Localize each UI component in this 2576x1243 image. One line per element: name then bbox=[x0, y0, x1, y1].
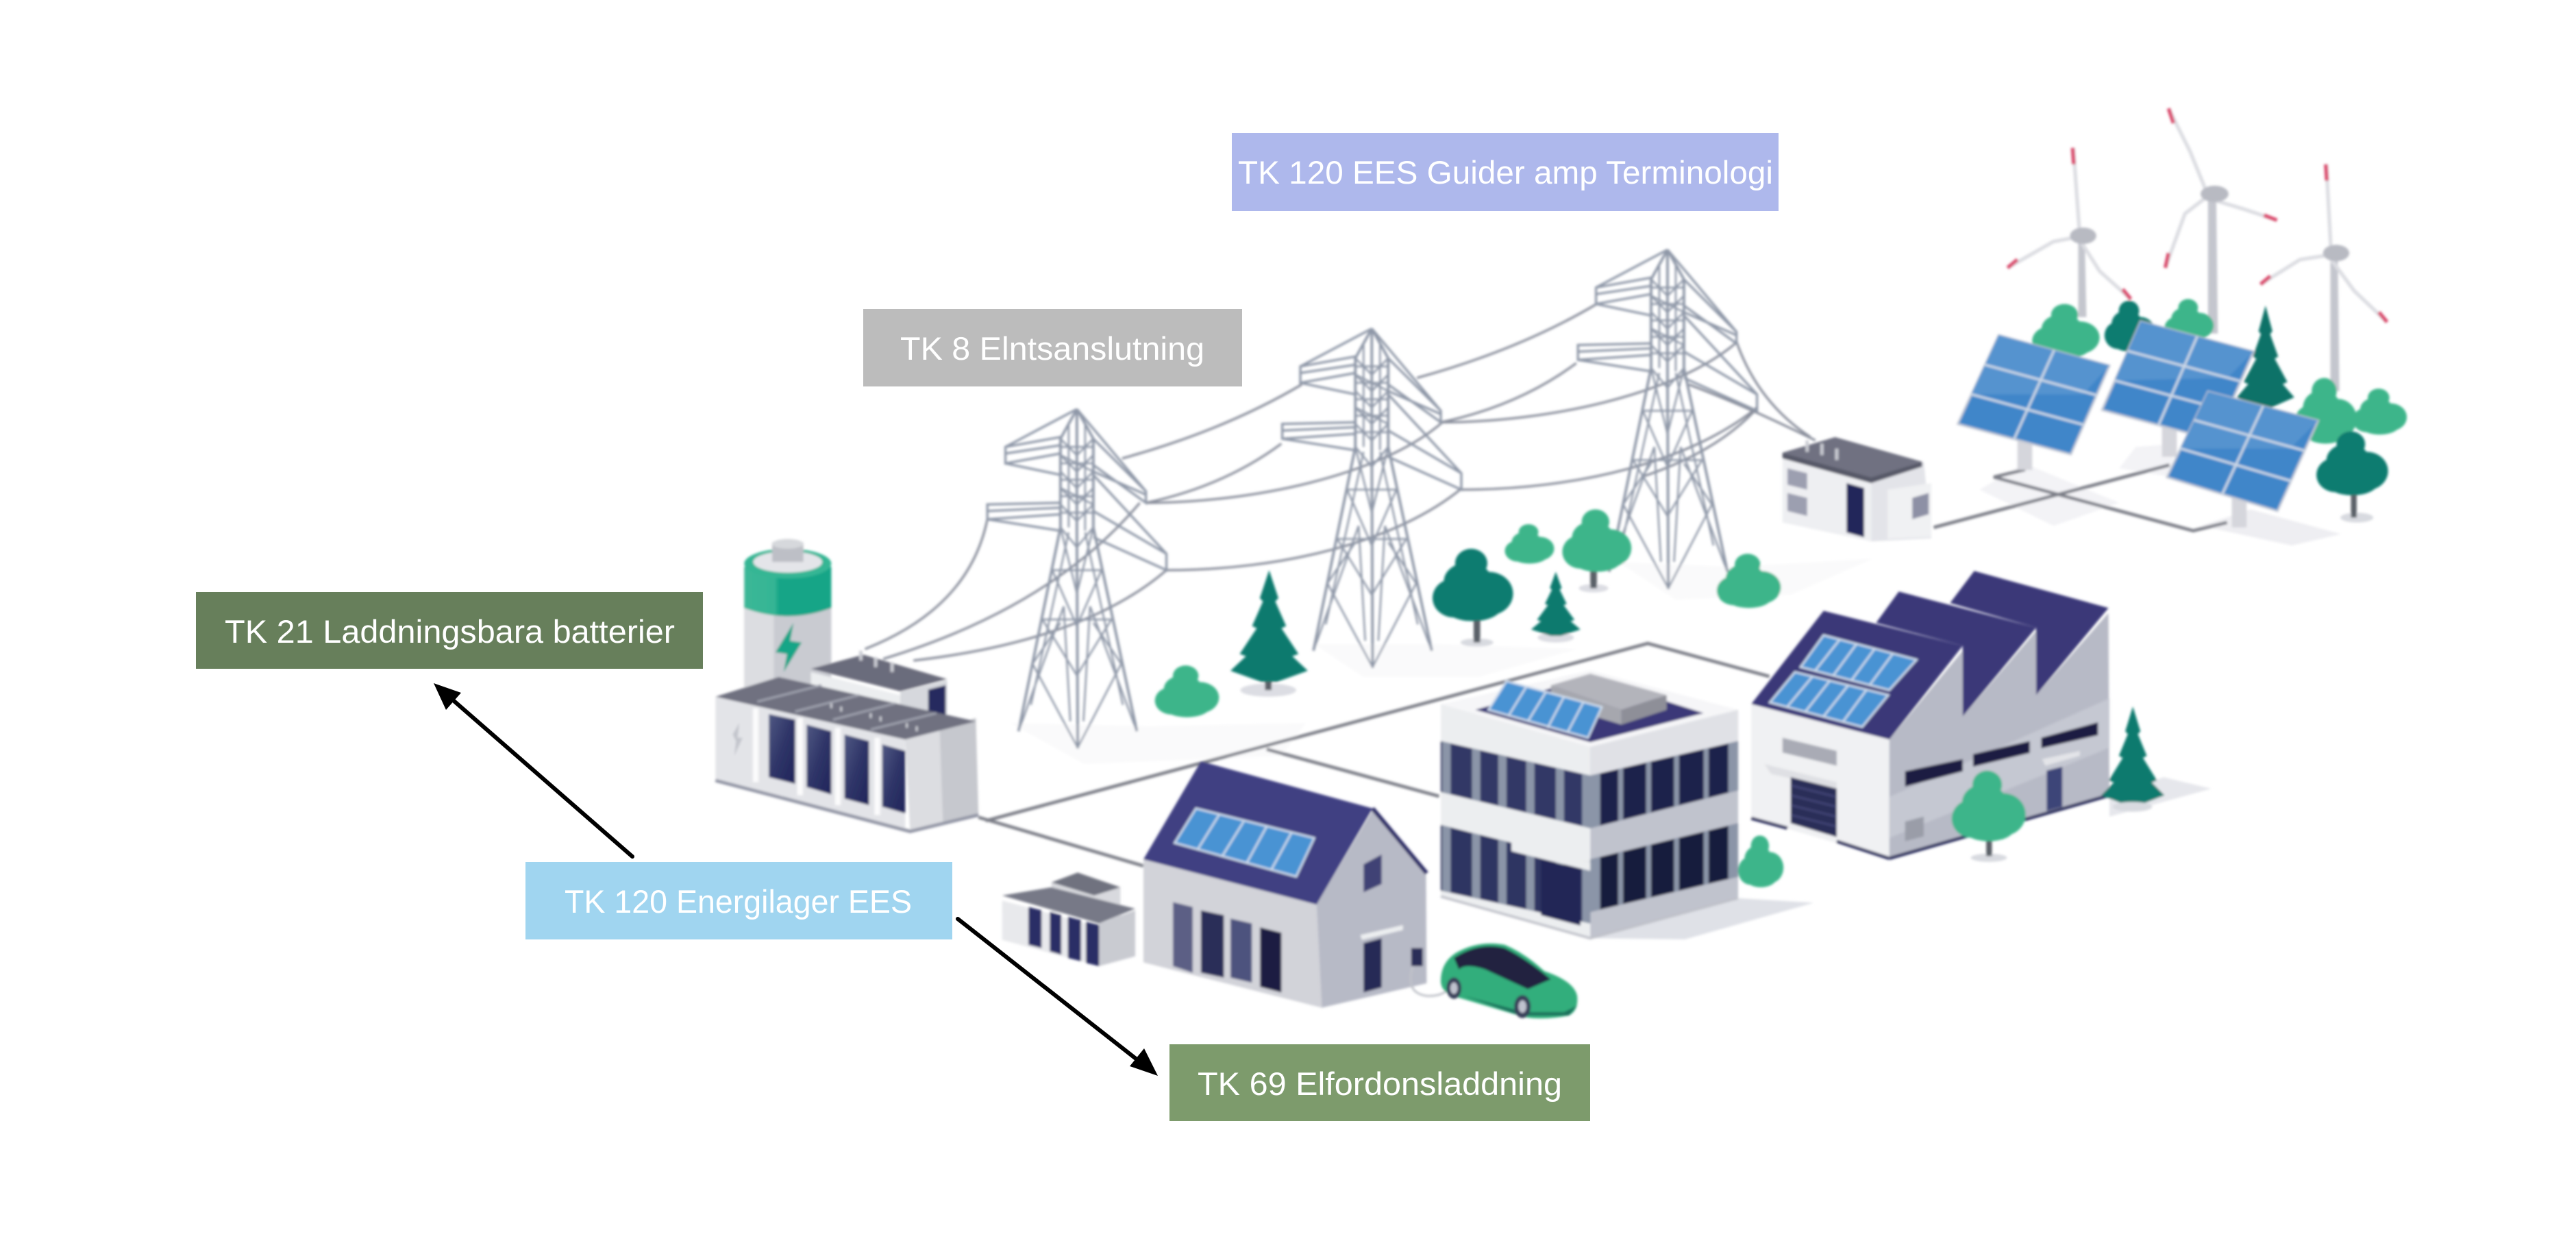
label: TK 120 EES Guider amp Terminologi bbox=[1232, 133, 1779, 211]
label: TK 21 Laddningsbara batterier: TK 21 Laddningsbara batterier bbox=[225, 613, 675, 650]
pylon 3 bbox=[1578, 249, 1757, 589]
solar panel 1 bbox=[1958, 335, 2109, 454]
label: TK 69 Elfordonsladdning bbox=[1169, 1044, 1590, 1121]
trees in the middle bbox=[1155, 509, 1781, 717]
small home battery bbox=[1002, 872, 1135, 966]
office rooftop solar panel bbox=[1489, 681, 1602, 738]
big battery icon bbox=[744, 539, 831, 690]
wind turbine 1 bbox=[2007, 148, 2131, 317]
label: TK 8 Elntsanslutning bbox=[863, 309, 1242, 386]
label: TK 8 Elntsanslutning: TK 8 Elntsanslutning bbox=[900, 330, 1204, 367]
solar panel posts bbox=[2018, 424, 2246, 528]
small rear battery unit bbox=[811, 651, 947, 739]
wind turbine 2 bbox=[2166, 108, 2277, 334]
wind turbine 3 bbox=[2261, 164, 2387, 391]
house bbox=[1143, 761, 1452, 1008]
illustration: energy grid scene bbox=[715, 108, 2407, 1018]
large battery storage block bbox=[715, 677, 978, 831]
trees near factory bbox=[1952, 706, 2164, 856]
bush beside office bbox=[1738, 835, 1783, 887]
factory bbox=[1751, 571, 2109, 859]
label: TK 21 Laddningsbara batterier bbox=[196, 592, 703, 669]
label: TK 69 Elfordonsladdning: TK 69 Elfordonsladdning bbox=[1198, 1066, 1562, 1102]
solar panel 3 bbox=[2167, 391, 2318, 511]
icon: lightning bolt bbox=[776, 623, 802, 672]
factory roof solar panels bbox=[1800, 635, 1916, 690]
office building bbox=[1441, 670, 1738, 938]
transformer unit bbox=[1783, 437, 1931, 541]
label: TK 120 Energilager EES bbox=[525, 862, 952, 939]
rooftop solar panel bbox=[1175, 809, 1314, 876]
arrow: Energilager to Laddningsbara batterier bbox=[434, 683, 632, 857]
ground cables bbox=[978, 465, 2227, 866]
electric car bbox=[1441, 944, 1577, 1018]
overhead wires bbox=[865, 304, 1816, 661]
solar panel 2 bbox=[2102, 321, 2253, 440]
pylon 1 bbox=[987, 409, 1167, 748]
arrow: Energilager to Elfordonsladdning bbox=[958, 919, 1158, 1076]
trees behind solar panels bbox=[2032, 299, 2407, 517]
label: TK 120 EES Guider amp Terminologi: TK 120 EES Guider amp Terminologi bbox=[1238, 154, 1773, 190]
ground shadows bbox=[1011, 443, 2373, 939]
label: TK 120 Energilager EES: TK 120 Energilager EES bbox=[565, 883, 912, 920]
pylon 2 bbox=[1283, 329, 1461, 668]
